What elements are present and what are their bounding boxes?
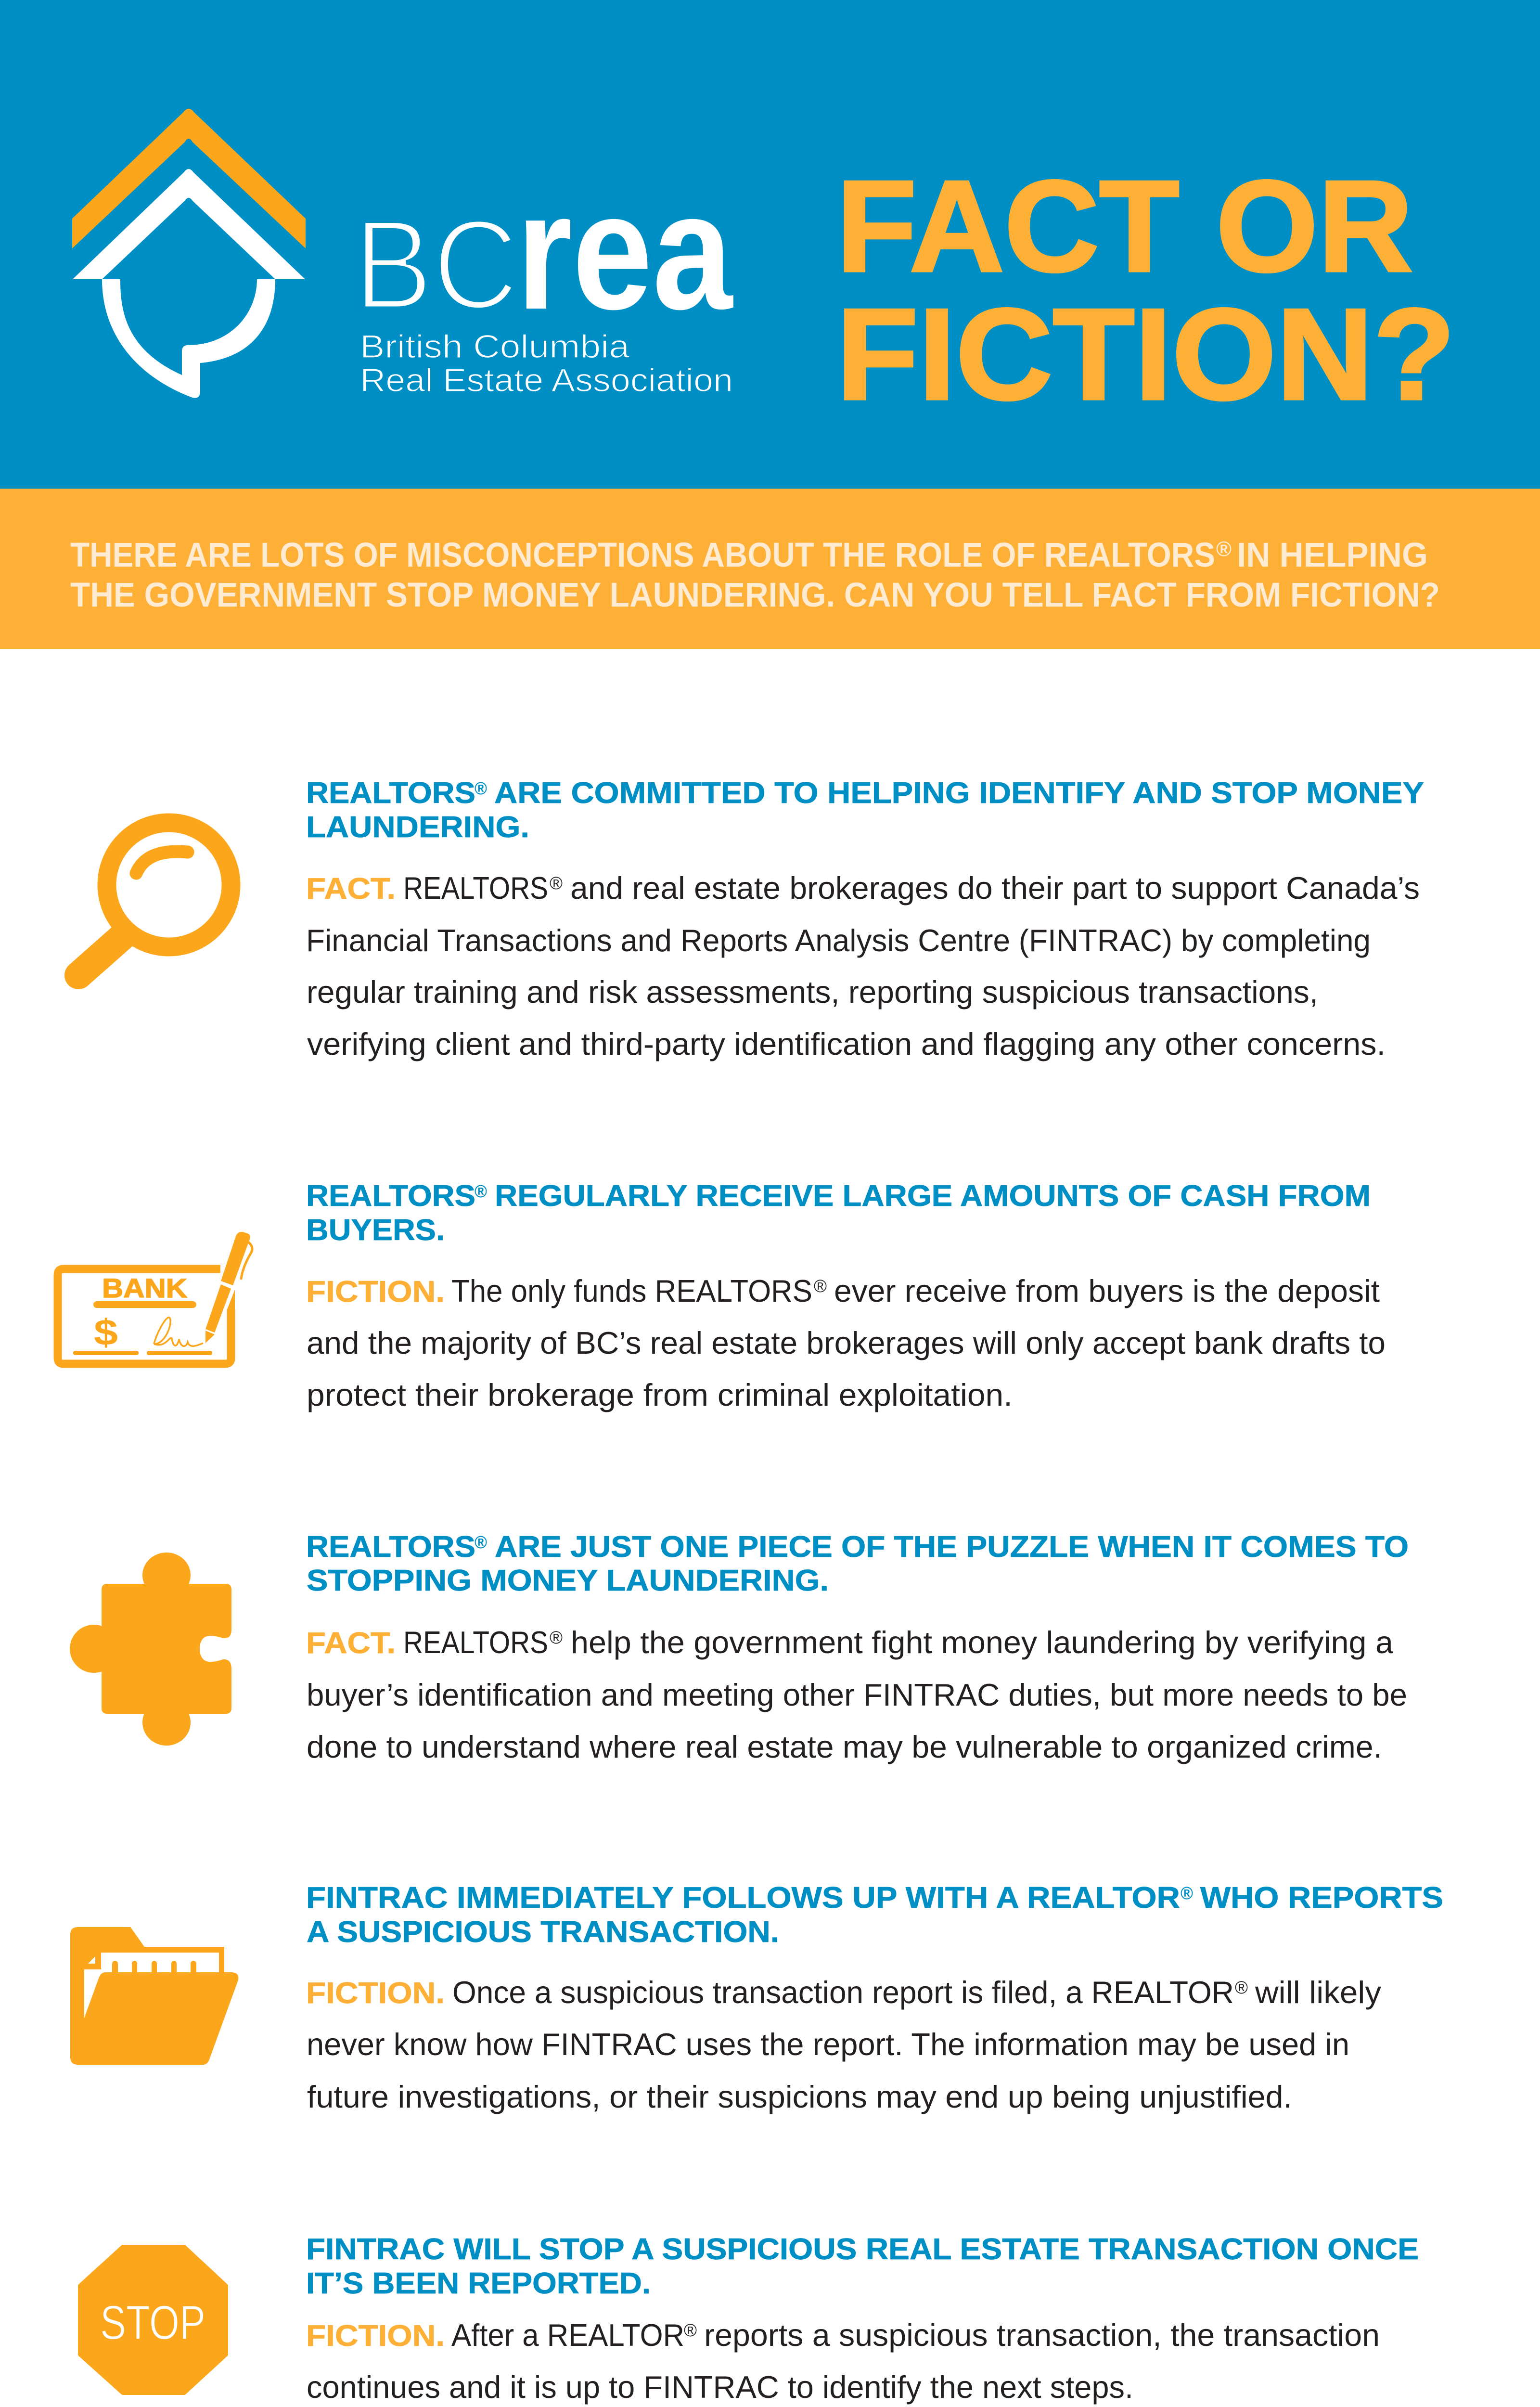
item 5 text: FINTRAC WILL STOP A SUSPICIOUS REAL ESTATE TRANSACTION ONCE bbox=[306, 2233, 1419, 2266]
icon: stop sign: STOP bbox=[100, 2296, 205, 2350]
item 3 text: ARE JUST ONE PIECE OF THE PUZZLE WHEN IT COMES TO bbox=[495, 1530, 1409, 1564]
item 4 text: ® bbox=[1181, 1883, 1193, 1903]
item 1 text: Financial Transactions and Reports Analysis Centre (FINTRAC) by completing bbox=[306, 923, 1371, 958]
icon: puzzle piece bbox=[70, 1553, 231, 1746]
item 4 text bbox=[306, 1881, 1443, 2114]
item 1 text bbox=[306, 776, 1424, 1061]
icon: bank cheque and pen: BANK bbox=[102, 1273, 187, 1303]
item 2 text: ever receive from buyers is the deposit bbox=[834, 1273, 1380, 1308]
item 3 text: ® bbox=[550, 1628, 563, 1647]
title: FICTION? bbox=[836, 282, 1455, 427]
item 1 text: ® bbox=[550, 873, 563, 893]
item 4 text: FINTRAC IMMEDIATELY FOLLOWS UP WITH A REALTOR bbox=[306, 1881, 1180, 1915]
item 3 text: done to understand where real estate may be vulnerable to organized crime. bbox=[307, 1729, 1382, 1764]
item 3 text: REALTORS bbox=[306, 1530, 475, 1564]
logo wordmark: Real Estate Association bbox=[360, 362, 733, 399]
intro band: ® bbox=[1216, 537, 1232, 561]
item 1 text: FACT. bbox=[306, 872, 396, 906]
icon: magnifying glass bbox=[78, 823, 231, 975]
icon: BCREA house logo bbox=[72, 109, 306, 398]
item 4 text: will likely bbox=[1255, 1975, 1382, 2010]
item 3 text: help the government fight money laundering by verifying a bbox=[571, 1625, 1394, 1660]
item 5 text: reports a suspicious transaction, the transaction bbox=[704, 2317, 1380, 2353]
title: FACT OR bbox=[836, 154, 1413, 299]
item 1 text: ® bbox=[475, 778, 487, 798]
item 3 text bbox=[306, 1530, 1409, 1764]
item 5 text: continues and it is up to FINTRAC to identify the next steps. bbox=[307, 2369, 1133, 2405]
logo wordmark: rea bbox=[516, 158, 733, 344]
item 4 text: A SUSPICIOUS TRANSACTION. bbox=[307, 1915, 779, 1949]
item 1 text: ARE COMMITTED TO HELPING IDENTIFY AND STOP MONEY bbox=[494, 776, 1424, 810]
item 2 text: FICTION. bbox=[306, 1275, 445, 1308]
item 4 text: never know how FINTRAC uses the report. The information may be used in bbox=[307, 2027, 1349, 2062]
item 1 text: LAUNDERING. bbox=[306, 811, 529, 844]
item 2 text: protect their brokerage from criminal exploitation. bbox=[307, 1377, 1013, 1412]
item 5 text: IT’S BEEN REPORTED. bbox=[306, 2267, 651, 2300]
icon: bank cheque and pen: $ bbox=[94, 1312, 118, 1353]
header panel bbox=[0, 0, 1540, 489]
item 3 text: ® bbox=[475, 1532, 487, 1552]
item 2 text: BUYERS. bbox=[306, 1214, 445, 1247]
item 5 text: FICTION. bbox=[306, 2319, 445, 2353]
title bbox=[836, 154, 1455, 427]
intro band: THE GOVERNMENT STOP MONEY LAUNDERING. CAN YOU TELL FACT FROM FICTION? bbox=[70, 576, 1440, 614]
item 2 text: ® bbox=[814, 1276, 827, 1296]
intro band: THERE ARE LOTS OF MISCONCEPTIONS ABOUT THE ROLE OF REALTORS bbox=[70, 536, 1215, 574]
item 5 text: ® bbox=[684, 2320, 697, 2340]
item 2 text bbox=[306, 1179, 1386, 1412]
item 3 text: FACT. bbox=[306, 1627, 396, 1660]
icon: stop sign bbox=[81, 2248, 225, 2392]
item 5 text: After a REALTOR bbox=[451, 2317, 684, 2353]
intro band bbox=[0, 489, 1540, 649]
item 2 text: REGULARLY RECEIVE LARGE AMOUNTS OF CASH FROM bbox=[495, 1179, 1371, 1213]
item 2 text: and the majority of BC’s real estate brokerages will only accept bank drafts to bbox=[307, 1325, 1386, 1360]
icon: bank cheque and pen bbox=[58, 1232, 252, 1364]
item 2 text: REALTORS bbox=[306, 1179, 475, 1213]
item 1 text: verifying client and third-party identification and flagging any other concerns. bbox=[307, 1026, 1386, 1061]
logo wordmark: BC bbox=[354, 194, 518, 336]
item 3 text: STOPPING MONEY LAUNDERING. bbox=[307, 1564, 829, 1597]
item 1 text: REALTORS bbox=[403, 870, 548, 906]
item 1 text: REALTORS bbox=[306, 776, 475, 810]
item 4 text: Once a suspicious transaction report is filed, a REALTOR bbox=[452, 1975, 1234, 2010]
icon: open folder bbox=[70, 1927, 238, 2065]
intro band: IN HELPING bbox=[1237, 536, 1428, 574]
item 4 text: WHO REPORTS bbox=[1200, 1881, 1443, 1915]
item 5 text bbox=[306, 2233, 1419, 2405]
item 4 text: FICTION. bbox=[306, 1977, 445, 2010]
item 3 text: buyer’s identification and meeting other FINTRAC duties, but more needs to be bbox=[307, 1677, 1407, 1712]
item 4 text: ® bbox=[1235, 1978, 1248, 1997]
item 2 text: The only funds REALTORS bbox=[451, 1273, 812, 1308]
logo wordmark: British Columbia bbox=[360, 328, 629, 365]
item 2 text: ® bbox=[475, 1181, 487, 1201]
logo wordmark bbox=[354, 158, 733, 399]
item 1 text: regular training and risk assessments, reporting suspicious transactions, bbox=[307, 974, 1318, 1009]
item 1 text: and real estate brokerages do their part to support Canada’s bbox=[570, 870, 1420, 906]
item 4 text: future investigations, or their suspicions may end up being unjustified. bbox=[307, 2079, 1292, 2114]
item 3 text: REALTORS bbox=[403, 1625, 548, 1660]
